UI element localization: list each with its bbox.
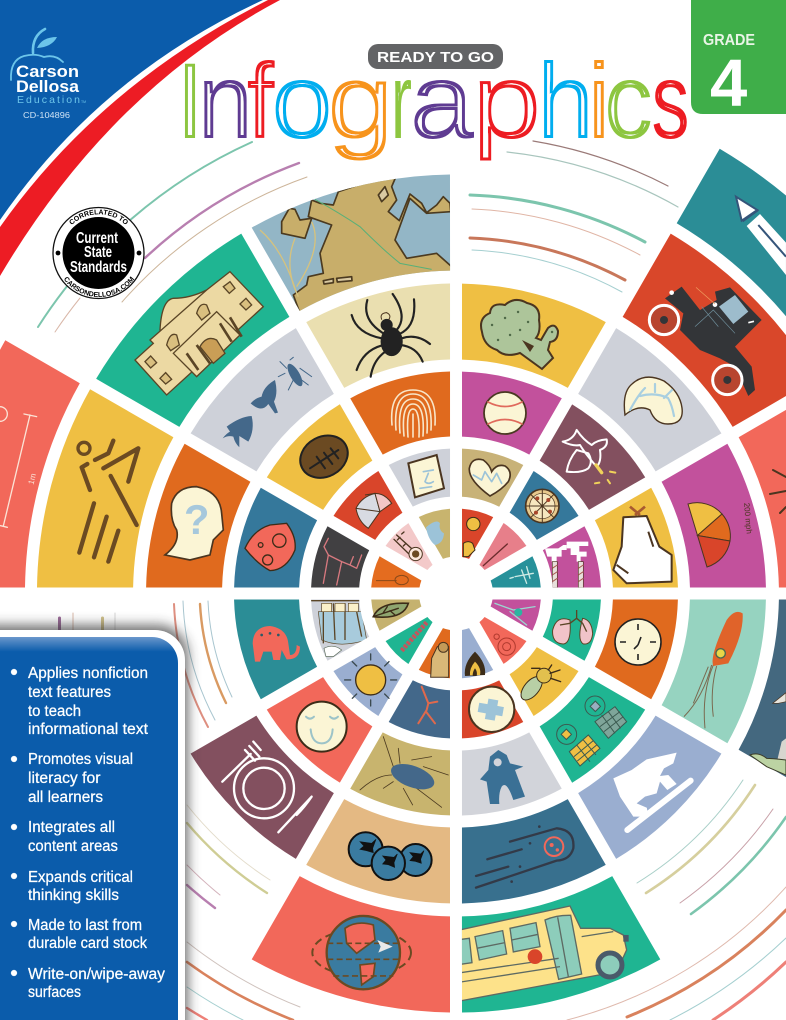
bullet: critical thinking: Expands critical: [28, 869, 133, 886]
sector: pie chart: [334, 463, 414, 545]
title: Infographics: i: [587, 40, 611, 161]
sector: heart: [462, 449, 523, 507]
sector: schoolhouse: [434, 717, 562, 839]
bullet: write-on wipe-away: [11, 966, 165, 1001]
icon: trash bag: [613, 507, 672, 583]
sector: speed gauge: [637, 444, 786, 620]
bullet: content areas: [11, 819, 118, 855]
bullet: nonfiction text features: to teach: [28, 703, 81, 720]
bullet: nonfiction text features: text features: [28, 684, 111, 701]
sector: baseball: [462, 372, 562, 455]
sector: polar bear: [559, 701, 721, 878]
grade tab: [691, 0, 786, 121]
title: Infographics: n: [198, 40, 253, 161]
icon: cockroach: [360, 737, 448, 807]
icon: brain: [624, 377, 682, 424]
sector: acorns: [462, 509, 493, 559]
icon: rope: [402, 622, 427, 651]
sector: trash bag: [579, 488, 701, 616]
sector: teal leaf: [489, 556, 548, 608]
sector: fish leaf fly: [191, 309, 353, 486]
sector: yellow figure: [37, 389, 173, 588]
icon: schoolhouse: [480, 750, 525, 804]
logo: Carson Dellosa Education: Carson: [16, 63, 79, 81]
icon: seed on line: [376, 575, 408, 585]
sector: Orion constellation: [311, 526, 369, 588]
sector: pizza: [505, 471, 587, 552]
icon: speedometer: [688, 502, 754, 567]
sector: Alamo: [96, 207, 313, 447]
icon: map of North Atlantic: [260, 175, 452, 313]
icon: beetle: [517, 665, 561, 704]
grade tab: 4: [710, 46, 747, 121]
sector: football: [267, 391, 389, 519]
icon: rays: [770, 470, 786, 513]
bullet: visual literacy: [11, 751, 133, 806]
badge: Correlated to Current State Standards: CARSONDELLOSA.COM: [64, 276, 134, 298]
bullet: visual literacy: Promotes visual: [28, 751, 133, 768]
bullet: visual literacy: all learners: [28, 789, 103, 806]
sector: salmon measure: [0, 340, 80, 588]
icon: asteroid: [245, 523, 295, 571]
icon: head with question mark: ?: [184, 496, 209, 543]
icon: book: [408, 455, 444, 497]
sector: globe: [252, 876, 450, 1012]
icon: speedometer: 200 mph: [742, 502, 754, 534]
icon: blueberries: [349, 832, 432, 880]
sector: plate: [171, 697, 348, 859]
badge: Correlated to Current State Standards: Current: [76, 230, 118, 247]
sector: elephant: [211, 571, 333, 699]
sector: thermometer: [386, 519, 445, 571]
panel: feature bullet list: [0, 625, 188, 1020]
icon: thermometer: [394, 532, 422, 561]
sector: slate right edge: [739, 600, 786, 798]
badge: Correlated to Current State Standards: Standards: [70, 259, 127, 276]
icon: baseball: [484, 392, 526, 434]
sector: smile: [253, 661, 381, 783]
sector: firefly: [531, 404, 659, 526]
sector: head: [146, 444, 250, 588]
sector: bus: [462, 876, 660, 1012]
icon: target rings: [494, 634, 515, 655]
icon: spider: [352, 294, 430, 377]
icon: acorns: [463, 517, 480, 557]
sector: sun: [325, 635, 407, 716]
title: Infographics: s: [652, 40, 690, 161]
sector: cockroach: [350, 732, 450, 815]
icon: lungs: [553, 610, 593, 644]
icon: log: [431, 642, 449, 677]
icon: clock: [615, 619, 661, 665]
sector: salmon right edge: [704, 389, 786, 629]
sector: lungs: [543, 600, 601, 661]
icon: pizza: [526, 489, 559, 523]
bullet: nonfiction text features: [11, 665, 149, 738]
icon: swimming creature: [495, 603, 535, 625]
sector: tan blue blob: [419, 501, 471, 561]
icon: falling figure: [78, 441, 138, 562]
sector: rope: [381, 605, 434, 664]
label: Ready to Go: READY TO GO: [377, 49, 494, 66]
icon: school bus: [457, 906, 629, 1002]
sector: hydroelectric dam: [311, 600, 369, 661]
title: Infographics: p: [472, 40, 542, 161]
title: Infographics: I: [175, 40, 205, 161]
sector: clock: [595, 600, 678, 699]
icon: blue blob: [426, 522, 444, 545]
icon: firefly: [563, 430, 615, 483]
icon: needle: [483, 544, 507, 566]
title: Infographics: f: [246, 40, 275, 161]
icon: pie chart: [356, 493, 392, 528]
sector: comet: [429, 775, 606, 937]
sector: book: [389, 434, 471, 515]
icon: Orion: [323, 538, 362, 585]
title: Infographics: a: [410, 40, 475, 161]
icon: one metre scale: 1m: [27, 472, 38, 485]
bullet: visual literacy: literacy for: [28, 770, 100, 787]
icon: sun: [345, 654, 397, 706]
sector: broccoli: [462, 284, 606, 388]
icon: monument and bushes: [750, 693, 786, 775]
bullet: durable card stock: [11, 917, 147, 952]
bullet: critical thinking: thinking skills: [28, 887, 119, 904]
icon: squid: [684, 612, 743, 728]
icon: fish, leaf and fly: [223, 357, 312, 447]
sector: fish skeleton: [491, 600, 541, 631]
grade tab: GRADE: [703, 32, 755, 49]
sector: map: [252, 174, 450, 311]
title: Infographics: c: [604, 40, 653, 161]
label: Ready to Go: [368, 44, 503, 69]
icon: branching crack: [418, 687, 437, 723]
bullet: durable card stock: Made to last from: [28, 917, 142, 934]
icon: heart with pulse: [469, 459, 510, 496]
sector: target: [467, 616, 526, 668]
sector: medical cross: [441, 672, 523, 753]
corner banner: blue with red swoosh: [0, 0, 280, 276]
logo: Carson Dellosa Education: CD-104896: [23, 111, 71, 120]
sector: circuits: [523, 668, 645, 796]
sector: squid: [662, 600, 766, 743]
sector: red car: [602, 234, 786, 451]
sector: flame: [441, 626, 493, 686]
sector: blueberries: [306, 799, 450, 903]
logo: Carson Dellosa Education: Dellosa: [16, 78, 80, 96]
icon: branch: [510, 567, 533, 583]
bullet: nonfiction text features: Applies nonfiction: [28, 665, 148, 682]
icon: plate and cutlery: [222, 742, 312, 832]
badge: Correlated to Current State Standards: CORRELATED TO: [70, 210, 128, 224]
sector: magnifier: [371, 556, 421, 588]
badge: Correlated to Current State Standards: State: [84, 244, 112, 261]
bullet: durable card stock: durable card stock: [28, 935, 147, 952]
icon: medical cross: [469, 687, 514, 732]
title: Infographics: g: [327, 40, 394, 161]
title: Infographics: o: [271, 40, 333, 161]
icon: antique car: [649, 287, 762, 396]
bullet: content areas: content areas: [28, 838, 118, 855]
icon: dam: [311, 601, 367, 657]
bullet: nonfiction text features: informational text: [28, 721, 149, 738]
icon: smiling face: [297, 702, 347, 752]
icon: circuit chips: [557, 696, 627, 766]
icon: elephant: [253, 626, 300, 662]
logo: Carson Dellosa Education: [11, 29, 86, 120]
icon: polar bear on ice: [613, 753, 691, 830]
icon: leaf: [373, 603, 408, 617]
sector: log: [419, 628, 450, 678]
icon: flame: [465, 652, 485, 676]
bullet: critical thinking: [11, 869, 133, 904]
icon: smokestacks: [545, 542, 588, 588]
title: Infographics: r: [391, 40, 412, 161]
sector: beetle: [498, 642, 578, 724]
sector: leaf: [364, 579, 423, 631]
icon: head with question mark: [165, 487, 223, 560]
bullet: content areas: Integrates all: [28, 819, 115, 836]
icon: Alamo building: [135, 272, 263, 395]
icon: one metre scale: [0, 407, 38, 527]
icon: pencil: [736, 197, 786, 275]
title: Infographics: h: [537, 40, 594, 161]
icon: football: [293, 427, 355, 486]
logo: Carson Dellosa Education: Education: [17, 94, 80, 106]
badge: Correlated to Current State Standards: [52, 206, 145, 300]
icon: globe: [312, 916, 411, 989]
bullet: write-on wipe-away: surfaces: [28, 984, 81, 1001]
bullet: write-on wipe-away: Write-on/wipe-away: [28, 966, 165, 983]
sector: smokestacks: [542, 526, 601, 588]
icon: fingerprint: [392, 390, 435, 437]
sector: needle: [478, 523, 531, 582]
icon: broccoli: [481, 300, 558, 369]
sector: brain: [564, 328, 741, 490]
sector: meteor: [234, 488, 317, 588]
icon: comet: [476, 825, 573, 888]
sector: fingerprint: [350, 348, 478, 470]
sector: spider: [306, 250, 483, 412]
sector: pencil: [649, 149, 786, 394]
logo: Carson Dellosa Education: TM: [81, 100, 86, 104]
sector: crack: [389, 680, 450, 738]
